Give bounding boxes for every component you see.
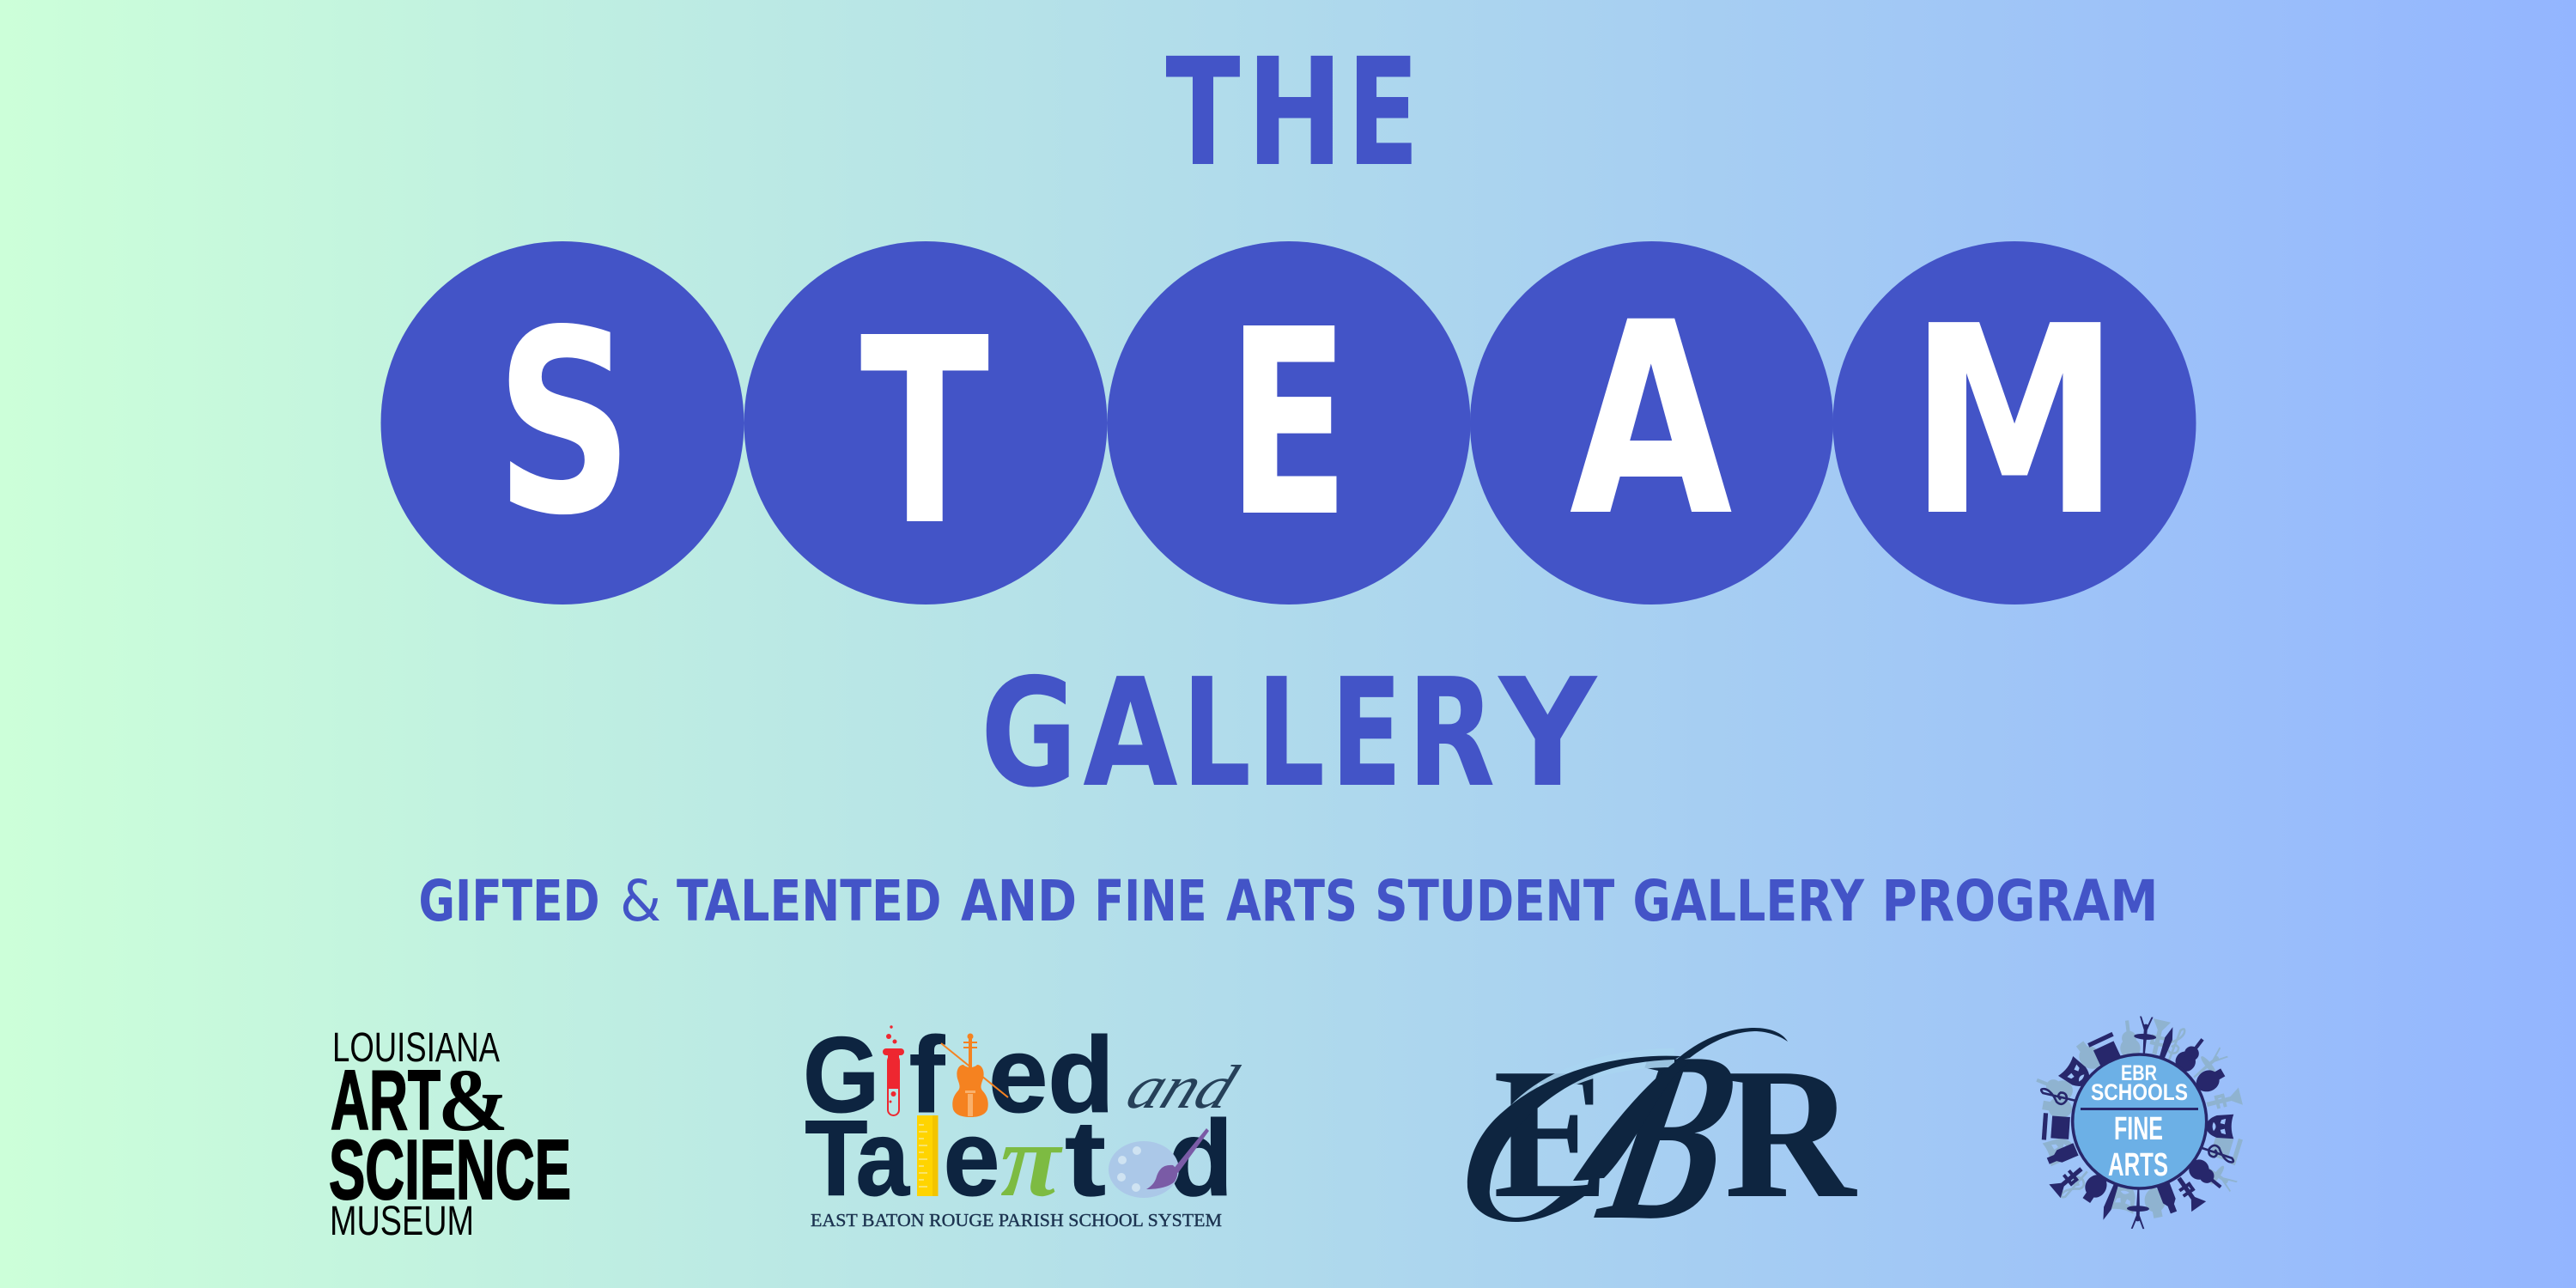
text: Gifted: G bbox=[803, 1016, 879, 1135]
circle: M: M bbox=[1909, 271, 2120, 574]
heading: GALLERY: Y bbox=[1498, 647, 1598, 821]
icon: diagonal stem bbox=[1573, 1058, 1688, 1181]
circle: T bbox=[744, 241, 1108, 605]
icon: violin bbox=[941, 1034, 1008, 1117]
heading: GALLERY: L bbox=[1257, 647, 1325, 821]
circle: E bbox=[1108, 241, 1470, 605]
text: R: R bbox=[1724, 1030, 1857, 1237]
text: and: and bbox=[1117, 1054, 1247, 1121]
circle: S bbox=[381, 241, 744, 605]
heading: GALLERY: R bbox=[1407, 647, 1495, 821]
heading: GALLERY: G bbox=[981, 647, 1078, 821]
circle: M bbox=[1832, 241, 2196, 605]
text: Talented: π bbox=[1000, 1103, 1064, 1218]
subtitle: & bbox=[620, 868, 661, 934]
heading: THE: H bbox=[1247, 26, 1343, 199]
subtitle: PROGRAM bbox=[1882, 868, 2159, 934]
badge text: EBR bbox=[2121, 1061, 2157, 1085]
heading: GALLERY: A bbox=[1083, 647, 1178, 821]
text: Talented: t bbox=[1065, 1099, 1106, 1218]
text: Talented: T bbox=[805, 1099, 868, 1218]
badge text: ARTS bbox=[2108, 1147, 2168, 1183]
text: Gifted: e bbox=[988, 1016, 1048, 1135]
text: East Baton Rouge Parish School System: EAST BATON ROUGE PARISH SCHOOL SYSTEM bbox=[811, 1210, 1222, 1230]
STEAM circle row bbox=[381, 241, 2196, 605]
circle: E: E bbox=[1227, 274, 1350, 574]
text: Talented: e bbox=[943, 1099, 999, 1218]
swash outline gap bbox=[1479, 1058, 1674, 1194]
badge text: SCHOOLS bbox=[2091, 1079, 2188, 1105]
text: Gifted: d bbox=[1048, 1016, 1115, 1135]
circle: A: A bbox=[1570, 265, 1734, 574]
badge circle bbox=[2073, 1054, 2207, 1188]
badge text: FINE bbox=[2114, 1111, 2163, 1147]
badge text bbox=[2091, 1061, 2188, 1183]
icon: test tube bbox=[883, 1025, 904, 1115]
logo: EBR bbox=[1467, 1002, 1857, 1270]
text: Talented: a bbox=[855, 1099, 910, 1218]
navy instrument ring bbox=[2039, 1016, 2236, 1229]
subtitle: TALENTED bbox=[677, 868, 941, 934]
icon: ruler bbox=[917, 1115, 938, 1196]
circle: A bbox=[1470, 241, 1833, 605]
logo: Louisiana Art & Science Museum bbox=[329, 1025, 571, 1244]
heading: GALLERY: L bbox=[1182, 647, 1251, 821]
text: B: B bbox=[1583, 1002, 1758, 1270]
subtitle: STUDENT bbox=[1375, 868, 1614, 934]
text: ampersand: & bbox=[438, 1051, 508, 1150]
subtitle: GALLERY bbox=[1633, 868, 1865, 934]
circle: S: S bbox=[495, 276, 634, 571]
text: E: E bbox=[1493, 1030, 1609, 1237]
icon: upper swash bbox=[1674, 1028, 1788, 1061]
text: Gifted: f bbox=[909, 1016, 945, 1135]
text: Talented: d bbox=[1168, 1099, 1233, 1218]
subtitle: GIFTED bbox=[419, 868, 599, 934]
logo: Gifted and Talented bbox=[803, 1016, 1247, 1230]
subtitle: ARTS bbox=[1226, 868, 1358, 934]
faded instrument ring bbox=[2033, 1018, 2243, 1219]
subtitle: FINE bbox=[1094, 868, 1207, 934]
icon: oval swash bbox=[1467, 1056, 1680, 1222]
heading: THE: T bbox=[1165, 26, 1241, 199]
text: ART: ART bbox=[331, 1053, 440, 1147]
heading: THE: E bbox=[1347, 26, 1419, 199]
logo: EBR Schools Fine Arts bbox=[2033, 1016, 2243, 1229]
heading: GALLERY: E bbox=[1331, 647, 1402, 821]
subtitle: AND bbox=[961, 868, 1077, 934]
text: LOUISIANA: LOUISIANA bbox=[332, 1025, 500, 1071]
icon: palette and brush bbox=[1109, 1128, 1209, 1198]
badge divider bbox=[2081, 1108, 2198, 1110]
text: MUSEUM: MUSEUM bbox=[330, 1199, 474, 1244]
circle: T: T bbox=[860, 283, 990, 582]
text: SCIENCE: SCIENCE bbox=[329, 1122, 571, 1217]
